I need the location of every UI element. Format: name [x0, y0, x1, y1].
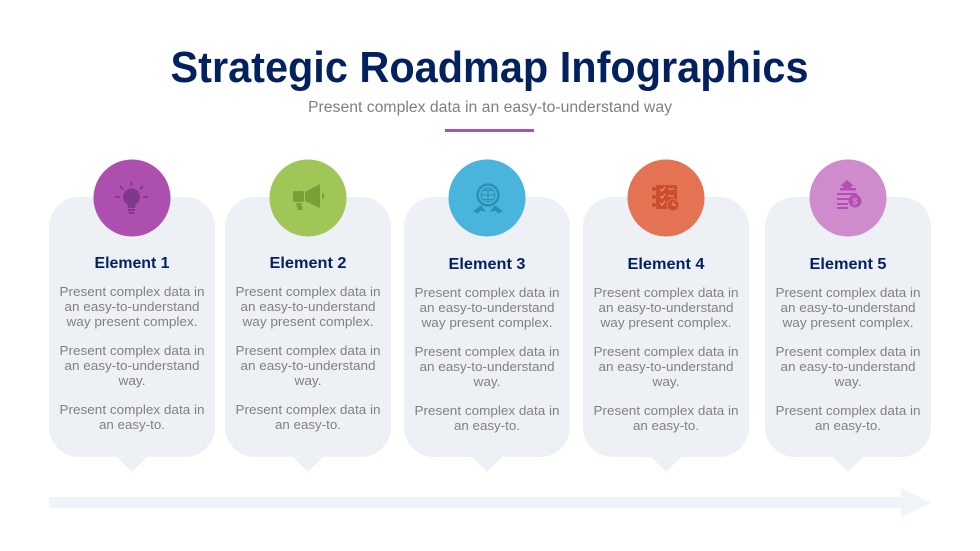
icon circle 3: [448, 160, 526, 236]
body text 3: an easy-to-understand: [420, 300, 554, 315]
body text 5: an easy-to-understand: [780, 300, 916, 315]
icon circle 4: [628, 160, 704, 236]
title accent underline: [445, 129, 534, 132]
card 1 background: [49, 197, 215, 472]
body text 5: way.: [833, 374, 862, 389]
heading 1: Element 1: [94, 255, 170, 272]
icon circle 5: [810, 160, 886, 236]
body text 4: way.: [651, 374, 680, 389]
heading 4: Element 4: [628, 256, 705, 273]
panel: element 5: [765, 160, 931, 472]
body text 4: Present complex data in: [594, 344, 738, 359]
panel: element 2: [225, 160, 391, 472]
icon: coins with arrow: $: [852, 196, 858, 206]
body text 2: [236, 284, 380, 432]
icon circle 1: [94, 160, 170, 236]
body text 4: [594, 285, 738, 433]
subtitle: Present complex data in an easy-to-understand way: [308, 99, 672, 116]
card 3 background: [404, 197, 570, 472]
timeline arrow: [49, 488, 931, 517]
heading 5: Element 5: [810, 256, 887, 273]
body text 3: [414, 285, 560, 433]
body text 5: Present complex data in: [776, 344, 920, 359]
body text 4: an easy-to-understand: [598, 300, 734, 315]
body text 1: way.: [117, 373, 146, 388]
body text 4: an easy-to.: [633, 418, 699, 433]
body text 5: an easy-to-understand: [780, 359, 916, 374]
icon: globe award: [474, 184, 502, 213]
body text 1: Present complex data in: [60, 284, 204, 299]
card 2 background: [225, 197, 391, 472]
panel: element 4: [583, 160, 749, 472]
body text 3: way.: [472, 374, 500, 389]
body text 5: way present complex.: [781, 315, 914, 330]
body text 1: an easy-to-understand: [64, 299, 200, 314]
heading 3: Element 3: [448, 256, 526, 273]
body text 2: way present complex.: [241, 314, 374, 329]
heading 2: Element 2: [270, 255, 347, 272]
body text 1: Present complex data in: [60, 402, 204, 417]
body text 2: Present complex data in: [236, 284, 380, 299]
body text 1: way present complex.: [65, 314, 197, 329]
icon: checklist with clock: [652, 185, 679, 211]
body text 2: an easy-to-understand: [240, 299, 376, 314]
body text 2: an easy-to.: [275, 417, 341, 432]
body text 3: an easy-to.: [454, 418, 520, 433]
body text 4: an easy-to-understand: [598, 359, 734, 374]
icon: megaphone: [293, 184, 325, 210]
body text 5: [776, 285, 920, 433]
panel: element 3: [404, 160, 570, 472]
body text 1: an easy-to-understand: [64, 358, 200, 373]
icon: light bulb: [115, 182, 148, 214]
card 4 background: [583, 197, 749, 472]
body text 4: way present complex.: [599, 315, 732, 330]
body text 1: an easy-to.: [99, 417, 165, 432]
body text 5: an easy-to.: [815, 418, 881, 433]
body text 3: Present complex data in: [414, 344, 560, 359]
body text 1: Present complex data in: [60, 343, 204, 358]
icon circle 2: [270, 160, 346, 236]
body text 3: Present complex data in: [414, 403, 560, 418]
card 5 background: [765, 197, 931, 472]
body text 2: way.: [293, 373, 322, 388]
body text 1: [60, 284, 204, 432]
icon: coins with arrow: [837, 180, 862, 209]
panel: element 1: [49, 160, 215, 472]
body text 4: Present complex data in: [594, 285, 738, 300]
body text 2: an easy-to-understand: [240, 358, 376, 373]
body text 3: Present complex data in: [414, 285, 560, 300]
body text 3: an easy-to-understand: [420, 359, 554, 374]
body text 5: Present complex data in: [776, 403, 920, 418]
body text 5: Present complex data in: [776, 285, 920, 300]
body text 4: Present complex data in: [594, 403, 738, 418]
body text 2: Present complex data in: [236, 343, 380, 358]
body text 2: Present complex data in: [236, 402, 380, 417]
body text 3: way present complex.: [420, 315, 552, 330]
title: Strategic Roadmap Infographics: [170, 43, 808, 92]
